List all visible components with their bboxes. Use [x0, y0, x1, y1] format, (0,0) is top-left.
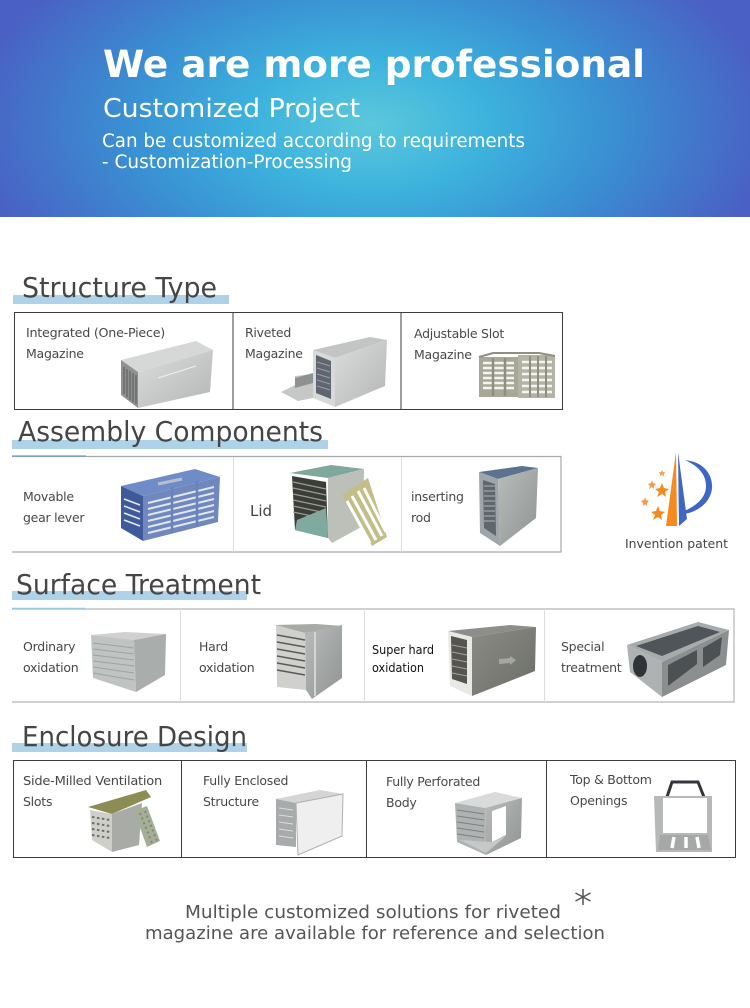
- adjustable slot magazine: Adjustable Slot: [414, 326, 504, 341]
- inserting rod: inserting: [411, 489, 464, 504]
- hard oxidation: [199, 624, 343, 699]
- special treatment: treatment: [561, 660, 622, 675]
- icon: asterisk: [576, 889, 590, 905]
- movable gear lever: gear lever: [23, 510, 85, 525]
- ordinary oxidation: [23, 632, 166, 692]
- ordinary oxidation: Ordinary: [23, 639, 76, 654]
- inserting rod: rod: [411, 510, 431, 525]
- riveted magazine: Riveted: [245, 325, 291, 340]
- fully perforated body: Fully Perforated: [386, 774, 480, 789]
- side-milled ventilation slots: Slots: [23, 794, 52, 809]
- riveted magazine: [245, 325, 387, 407]
- icon: invention patent logo: [625, 452, 728, 551]
- panel: assembly components: [12, 456, 561, 552]
- fully perforated body: Body: [386, 795, 417, 810]
- panel: enclosure design: [14, 760, 736, 858]
- adjustable slot magazine: [414, 326, 555, 398]
- heading: structure type: Structure Type: [22, 271, 217, 304]
- side-milled ventilation slots: Side-Milled Ventilation: [23, 773, 162, 788]
- lid: Lid: [250, 502, 272, 520]
- super hard oxidation: oxidation: [372, 661, 424, 675]
- description: Can be customized according to requirements: [102, 131, 525, 152]
- footer note: Multiple customized solutions for riveted: [185, 902, 561, 923]
- fully perforated body: [386, 774, 522, 855]
- description: - Customization-Processing: [102, 152, 352, 173]
- movable gear lever: [23, 469, 220, 541]
- title: We are more professional: [103, 43, 645, 86]
- hard oxidation: oxidation: [199, 660, 254, 675]
- top and bottom openings: Top & Bottom: [569, 772, 652, 787]
- fully enclosed structure: [203, 773, 343, 855]
- heading: surface treatment: Surface Treatment: [16, 568, 261, 601]
- integrated magazine: [26, 325, 213, 408]
- special treatment: [561, 622, 729, 697]
- special treatment: Special: [561, 639, 604, 654]
- movable gear lever: Movable: [23, 489, 74, 504]
- heading: assembly components: Assembly Components: [18, 415, 323, 448]
- subtitle: Customized Project: [103, 94, 360, 124]
- panel: structure type: [14, 312, 562, 410]
- integrated magazine: Integrated (One-Piece): [26, 325, 165, 340]
- side-milled ventilation slots: [23, 773, 162, 852]
- fully enclosed structure: Structure: [203, 794, 259, 809]
- footer note: magazine are available for reference and selection: [145, 923, 605, 944]
- fully enclosed structure: Fully Enclosed: [203, 773, 288, 788]
- hard oxidation: Hard: [199, 639, 228, 654]
- adjustable slot magazine: Magazine: [414, 347, 472, 362]
- footer note: [145, 889, 605, 944]
- top and bottom openings: Openings: [570, 793, 627, 808]
- riveted magazine: Magazine: [245, 346, 303, 361]
- top and bottom openings: [569, 772, 712, 852]
- ordinary oxidation: oxidation: [23, 660, 78, 675]
- heading: enclosure design: Enclosure Design: [22, 720, 247, 753]
- integrated magazine: Magazine: [26, 346, 84, 361]
- inserting rod: [411, 466, 538, 546]
- header banner: [0, 0, 750, 217]
- super hard oxidation: [372, 625, 536, 696]
- icon: invention patent logo: Invention patent: [625, 536, 728, 551]
- lid: [250, 465, 387, 546]
- super hard oxidation: Super hard: [372, 643, 434, 657]
- panel: surface treatment: [12, 608, 734, 702]
